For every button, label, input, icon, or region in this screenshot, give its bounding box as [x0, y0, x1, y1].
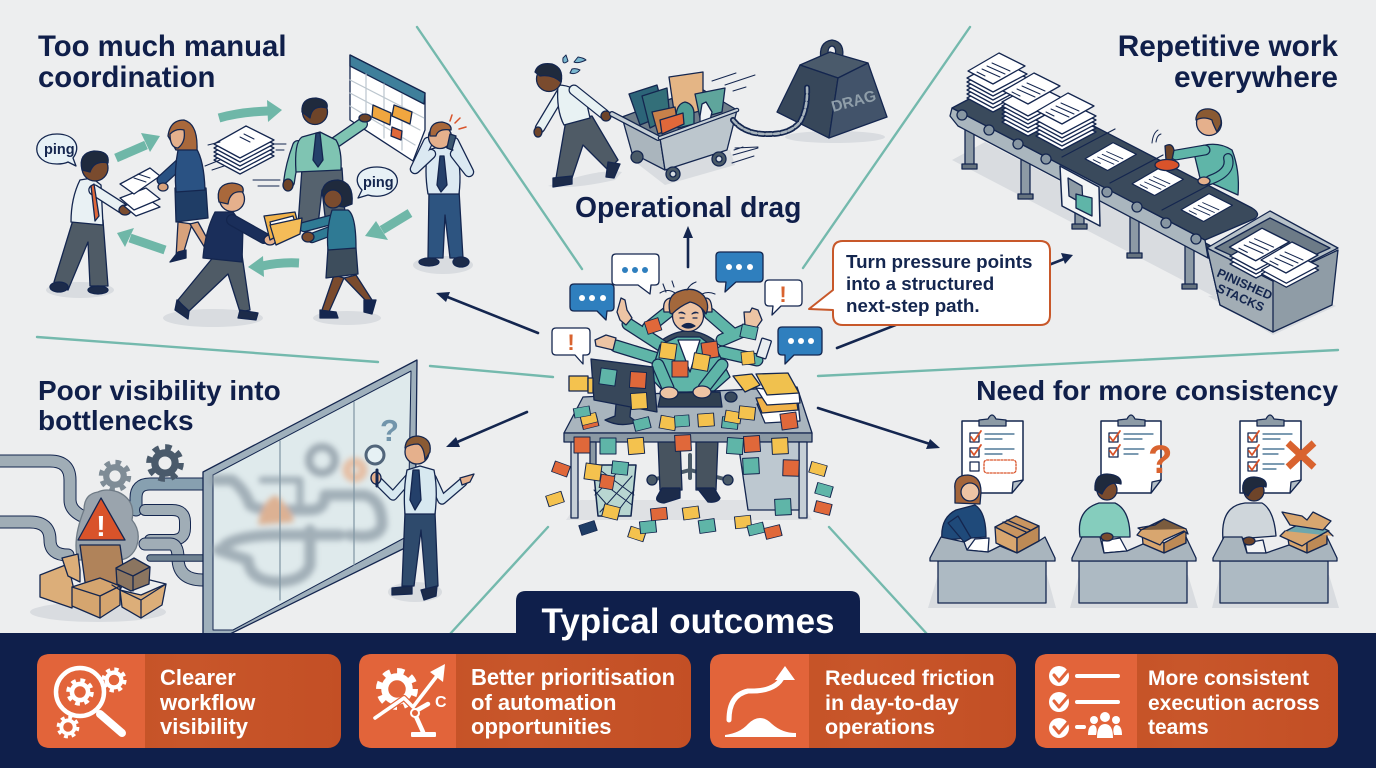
icon: gear, rising arrow and robot arm [375, 664, 447, 737]
legs and shoes [657, 440, 720, 503]
tousled hair [660, 281, 715, 314]
card: clearer workflow visibility [37, 654, 341, 748]
worried face [679, 312, 698, 328]
keyboard [658, 392, 722, 407]
speech bubble: blue dots right [778, 327, 822, 364]
icon: orange cross [1288, 443, 1314, 467]
arrow: to operational drag [683, 226, 693, 267]
desk 3 [1212, 561, 1339, 608]
heading: poor visibility into bottlenecks: bottlenecks [38, 405, 194, 436]
worker 3 with open box [1223, 477, 1333, 553]
speech bubble: ping right: ping [363, 175, 394, 191]
calendar [350, 55, 425, 161]
single sheets on belt [1085, 143, 1232, 222]
speech bubble: alert left [552, 328, 590, 364]
conveyor legs [962, 125, 1197, 289]
worker torso behind belt [1193, 144, 1238, 195]
panel: operational drag [534, 40, 887, 223]
heading: repetitive work everywhere: Repetitive work [1118, 30, 1338, 63]
worker with stamp [1152, 109, 1229, 185]
desk [564, 387, 812, 518]
desk 1 [928, 561, 1056, 608]
card: better prioritisation: Better prioritisation [471, 664, 675, 690]
card: clearer workflow visibility: Clearer [160, 665, 236, 690]
forearms to keyboard [658, 365, 722, 399]
drag weight: DRAG [830, 88, 878, 116]
head [672, 300, 704, 332]
pile of boxes [30, 545, 166, 622]
speech bubble: alert right [765, 280, 802, 315]
callout: into a structured [846, 273, 994, 294]
paper stack held [120, 168, 160, 216]
speech bubble: ping right [357, 167, 397, 198]
desk 2 [1070, 561, 1198, 608]
bin label: PINISHED [1215, 266, 1274, 303]
torso [650, 337, 730, 392]
hands [595, 298, 772, 359]
man pointing at calendar [283, 98, 371, 225]
icon: checklist and team [1049, 666, 1122, 738]
chain [733, 87, 807, 134]
chair [647, 331, 733, 485]
panel: need for more consistency [928, 374, 1339, 608]
pipes [0, 461, 203, 580]
woman in blue jacket [158, 120, 208, 262]
paper stacks on belt [967, 53, 1096, 150]
sweating man pulling cart [534, 55, 622, 187]
drag weight [777, 40, 887, 143]
heading: too much manual coordination: Too much manual [38, 30, 286, 63]
flying paper stack [205, 126, 286, 186]
wastebasket [593, 465, 636, 516]
woman with folder [302, 180, 381, 325]
cart with goods [612, 72, 758, 185]
desk tops [930, 537, 1337, 561]
worker 1 with box [942, 475, 1039, 553]
heading: poor visibility into bottlenecks: Poor visibility into [38, 375, 281, 406]
callout [809, 241, 1050, 325]
card 2 remaining lines: of automation [471, 690, 616, 715]
central overwhelmed worker [546, 252, 833, 542]
blurred pipes behind glass [215, 447, 382, 582]
floor shadow [566, 500, 812, 520]
checklist 2 [1101, 415, 1172, 493]
callout: Turn pressure points [846, 251, 1032, 272]
card: more consistent execution: execution across [1148, 692, 1320, 715]
icon: question mark: ? [380, 413, 399, 448]
speech bubble: blue dots top [716, 252, 763, 292]
arrow: to consistency [818, 408, 940, 449]
icon: path over speed bump [725, 666, 796, 737]
conveyor belt [950, 80, 1258, 262]
teal divider rays [37, 27, 1338, 634]
six flailing arms [616, 312, 757, 360]
icon: question mark: ? [1148, 438, 1172, 482]
panel: poor visibility into bottlenecks [0, 360, 474, 634]
card: reduced friction: Reduced friction [825, 666, 995, 690]
speech bubble: ping left [37, 134, 77, 166]
speech bubble: alert left: ! [567, 330, 575, 355]
tab: typical outcomes: Typical outcomes [541, 602, 835, 641]
icon: warning triangle: ! [96, 511, 106, 543]
heading: operational drag: Operational drag [575, 191, 801, 223]
speech bubble: white dots [612, 254, 659, 294]
card 2 remaining lines: opportunities [471, 714, 612, 739]
bin label: STACKS [1215, 281, 1266, 314]
card: clearer workflow visibility: visibility [160, 714, 249, 739]
arrow: to poor visibility [446, 412, 527, 447]
arrow: to repetitive work [837, 253, 1073, 348]
heading: too much manual coordination: coordination [38, 61, 215, 94]
callout: next-step path. [846, 295, 980, 316]
outcomes band [0, 591, 1376, 768]
icon: gear, rising arrow and robot arm: C [435, 694, 447, 711]
panel: too much manual coordination [37, 30, 473, 327]
frosted glass wall [203, 360, 417, 634]
scattered sticky notes [546, 318, 833, 542]
man with magnifier [366, 436, 474, 602]
panel: repetitive work everywhere [950, 30, 1338, 335]
speech bubble: ping left: ping [44, 142, 75, 158]
person passing papers [46, 151, 131, 298]
card: more consistent execution: More consistent [1148, 667, 1309, 690]
man on phone [413, 115, 473, 274]
card: reduced friction: in day-to-day [825, 691, 959, 715]
icon: warning triangle [78, 498, 125, 543]
conveyor shadow [952, 142, 1230, 297]
card: better prioritisation [359, 654, 691, 748]
card: more consistent execution [1035, 654, 1338, 748]
monitor [591, 359, 657, 425]
speech bubble: alert right: ! [779, 282, 787, 307]
checklist 3 [1240, 415, 1314, 493]
card: reduced friction [710, 654, 1016, 748]
heading: need for more consistency: Need for more consistency [976, 374, 1338, 406]
card: clearer workflow visibility: workflow [159, 690, 256, 715]
worker 2 with open box [1079, 474, 1188, 553]
folder [264, 212, 302, 245]
arrow: to manual coordination [436, 292, 538, 333]
card: more consistent execution: teams [1148, 716, 1209, 739]
checklist 1 [962, 415, 1023, 493]
smoke cloud [76, 490, 138, 560]
speech bubble: blue dots left [570, 284, 614, 320]
heading: repetitive work everywhere: everywhere [1174, 61, 1338, 94]
flow arrows [116, 100, 410, 277]
finished stacks bin [1207, 211, 1338, 335]
process sign [1060, 166, 1100, 226]
tab: typical outcomes [516, 591, 860, 641]
icon: gears [102, 448, 180, 489]
man carrying folder [163, 183, 276, 327]
book stack [756, 373, 800, 423]
icon: magnifier and gears [56, 668, 124, 736]
card: reduced friction: operations [825, 715, 935, 739]
notebook and mug [569, 374, 760, 402]
